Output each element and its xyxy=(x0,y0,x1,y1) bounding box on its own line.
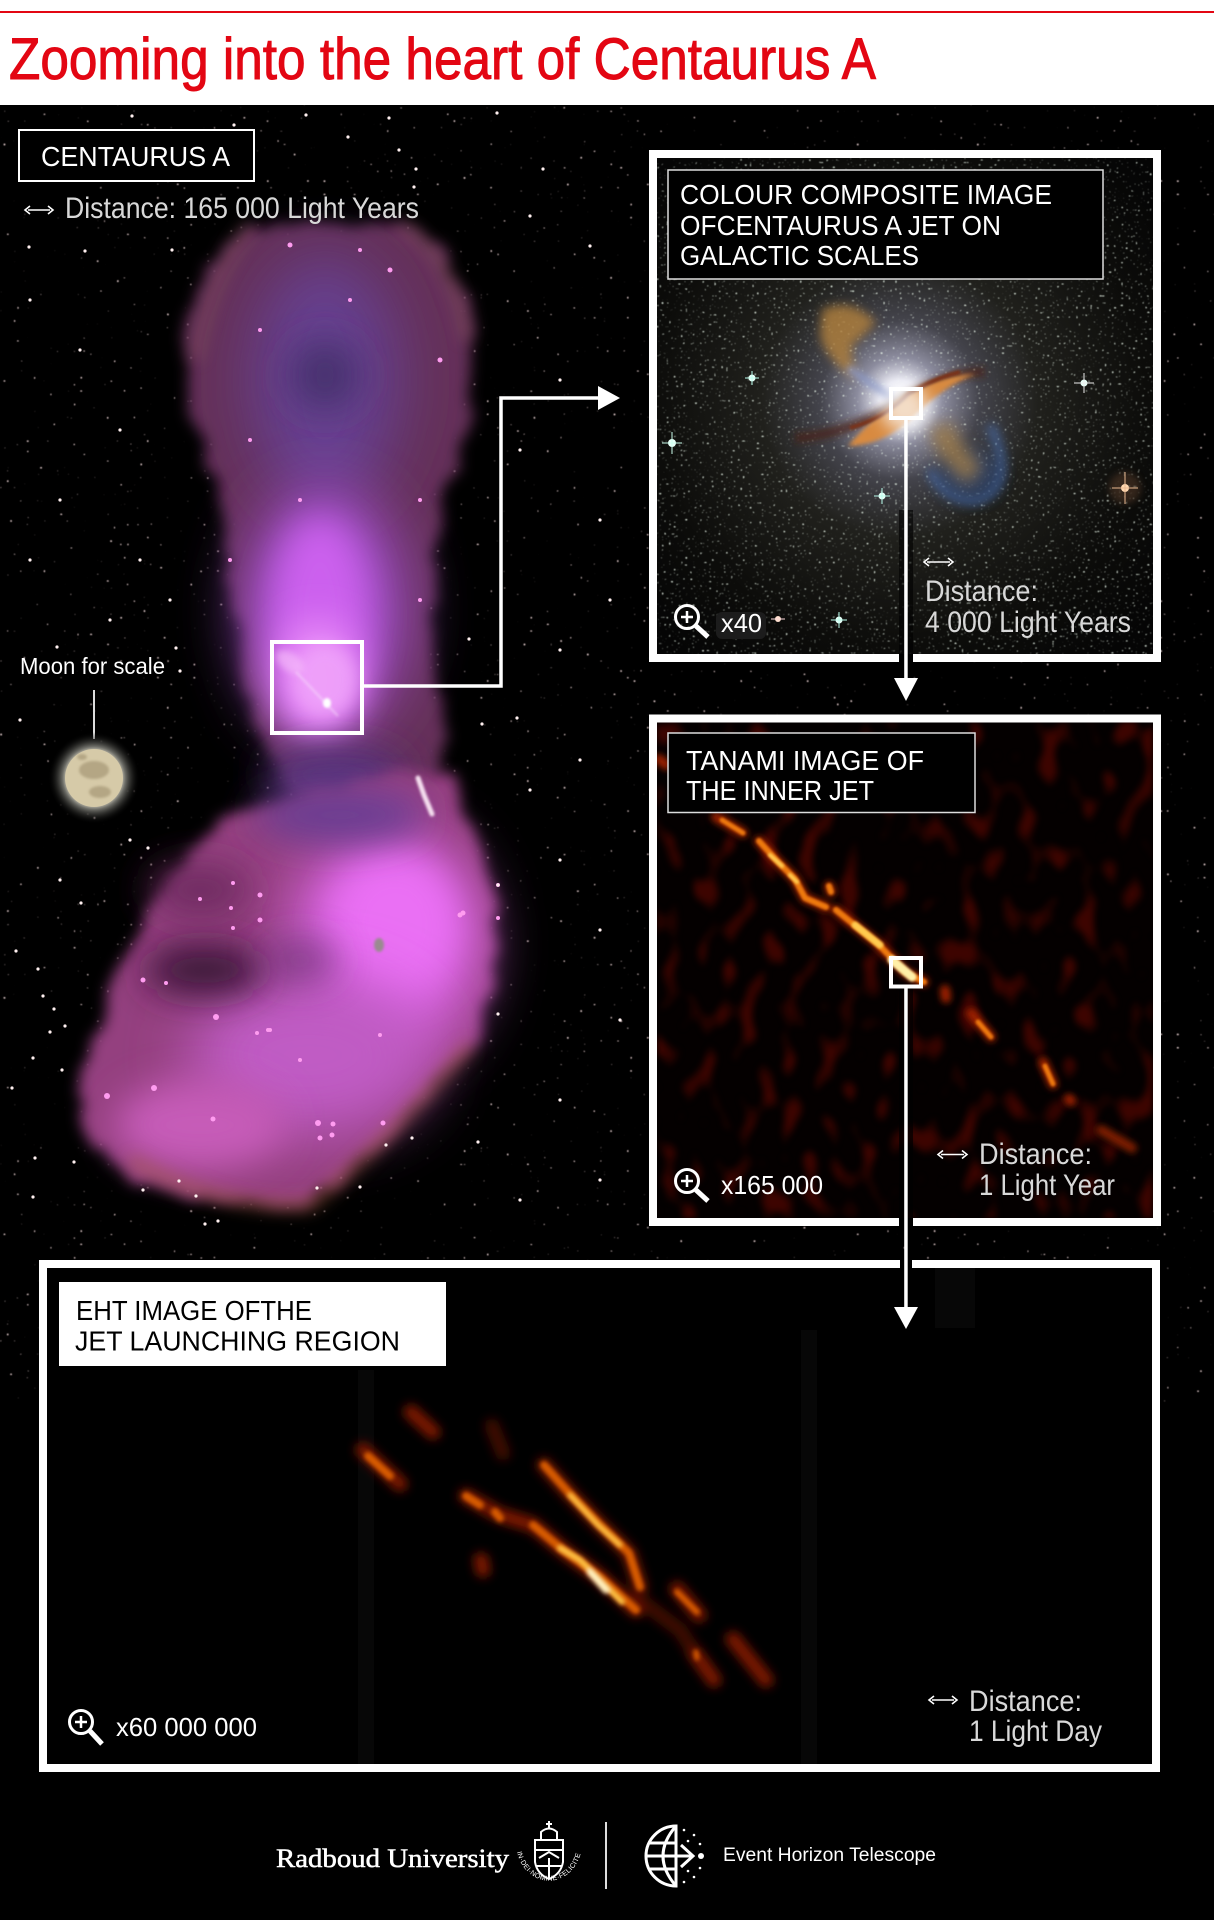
zoom box on galaxy core xyxy=(272,642,362,733)
label: Centaurus A xyxy=(19,130,254,181)
label: colour composite: COLOUR COMPOSITE IMAGE xyxy=(680,179,1052,210)
scale: 1 light day xyxy=(929,1685,1102,1748)
bright stars xyxy=(662,371,1141,628)
magnifier x40: x40 xyxy=(721,608,762,638)
label: colour composite: GALACTIC SCALES xyxy=(680,240,919,271)
blue lower lobe xyxy=(930,425,1001,500)
scale: 1 light day: Distance: xyxy=(969,1685,1082,1718)
jet xyxy=(659,759,1132,1148)
Event Horizon Telescope logo: Event Horizon Telescope xyxy=(723,1845,936,1866)
Event Horizon Telescope logo xyxy=(646,1826,936,1886)
arrow: TANAMI to EHT xyxy=(891,958,921,1329)
bright field stars xyxy=(12,113,620,1224)
label: EHT: JET LAUNCHING REGION xyxy=(75,1326,400,1356)
label: TANAMI xyxy=(668,733,975,812)
label: colour composite: OFCENTAURUS A JET ON xyxy=(680,210,1001,241)
scale: 1 light year: Distance: xyxy=(979,1138,1092,1171)
upper lobe xyxy=(185,222,475,803)
scale: 1 light day: 1 Light Day xyxy=(969,1715,1102,1748)
scale: 1 light year: 1 Light Year xyxy=(979,1169,1115,1202)
dust lane xyxy=(795,372,985,438)
footer logos xyxy=(276,1821,936,1889)
moon disc xyxy=(48,732,140,824)
label: Centaurus A: CENTAURUS A xyxy=(41,141,230,172)
panel: TANAMI image xyxy=(653,718,1157,1226)
scale: 1 light year xyxy=(938,1138,1115,1202)
panel: colour composite xyxy=(653,154,1157,662)
orange upper lobe xyxy=(820,305,876,380)
scale: 4 000 light years: 4 000 Light Years xyxy=(925,606,1131,639)
label: EHT xyxy=(59,1282,446,1366)
connector arrow to composite panel xyxy=(363,386,620,686)
pink stars over lobes xyxy=(104,242,500,1140)
Radboud University logo: Radboud University xyxy=(276,1844,509,1873)
shield crest xyxy=(535,1821,563,1879)
starfield background xyxy=(0,105,1214,1405)
star field xyxy=(657,158,1153,654)
scale: 4 000 light years xyxy=(924,558,1131,639)
header band xyxy=(0,0,1214,105)
radio galaxy lobes xyxy=(77,222,500,1209)
magnifier x60 000 000 xyxy=(70,1710,257,1744)
panel: EHT image xyxy=(43,1260,1156,1768)
Radboud University logo xyxy=(276,1821,580,1881)
lower lobe xyxy=(77,770,497,1209)
EHT jet xyxy=(363,1412,766,1680)
scale: 165 000 light years: Distance: 165 000 Light Years xyxy=(65,192,419,225)
magnifier x165 000: x165 000 xyxy=(721,1170,823,1200)
noise blotches xyxy=(657,722,1153,1218)
magnifier x40 xyxy=(676,606,766,639)
label: EHT: EHT IMAGE OFTHE xyxy=(76,1295,312,1326)
label: TANAMI: THE INNER JET xyxy=(686,775,874,806)
title: Zooming into the heart of Centaurus A xyxy=(9,27,876,92)
moon label: Moon for scale xyxy=(20,653,165,679)
arrow: composite to TANAMI xyxy=(891,389,921,701)
magnifier x60 000 000: x60 000 000 xyxy=(116,1712,257,1742)
label: colour composite xyxy=(668,170,1103,279)
moon for scale xyxy=(20,653,165,824)
label: TANAMI: TANAMI IMAGE OF xyxy=(686,745,924,776)
scale: 4 000 light years: Distance: xyxy=(925,575,1038,608)
Radboud University logo: IN·DEI·NOMINE·FELICITER xyxy=(517,1852,580,1881)
magnifier x165 000 xyxy=(676,1170,823,1201)
